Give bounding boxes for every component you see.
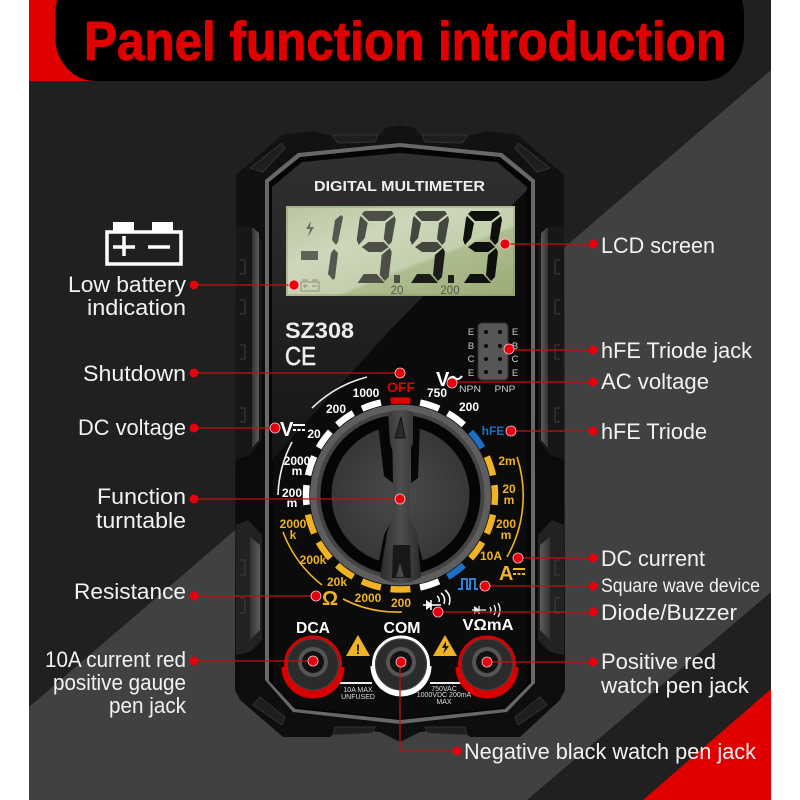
- rotary dial: [310, 404, 491, 586]
- label: low battery indication: Low battery: [68, 272, 186, 297]
- dial scale labels: hFE: [482, 424, 504, 438]
- label: hFE triode: hFE Triode: [601, 419, 707, 444]
- LCD bolt icon: [306, 221, 314, 237]
- hFE socket: E: [512, 327, 518, 338]
- dial function symbols: V: [280, 419, 294, 441]
- label: function turntable: [96, 484, 186, 533]
- dial scale labels: 20k: [327, 575, 347, 589]
- dial function symbols: A: [499, 563, 513, 585]
- jack DCA: [282, 637, 344, 699]
- label: square wave device: Square wave device: [601, 576, 760, 597]
- dial scale labels: m: [501, 528, 511, 542]
- jack ratings: UNFUSED: [341, 694, 375, 701]
- dial scale labels: 200k: [300, 553, 327, 567]
- hFE socket: PNP: [494, 384, 516, 395]
- dial handle: [380, 410, 421, 584]
- label: low battery indication: [68, 272, 186, 320]
- dial scale labels: [280, 379, 516, 610]
- jack ratings: MAX: [436, 699, 452, 706]
- leader dots inside device: [270, 239, 523, 667]
- dial scale labels: m: [292, 464, 302, 478]
- title: Panel function introduction: [84, 10, 726, 72]
- shell corner recesses: [250, 135, 550, 735]
- dial scale labels: k: [290, 528, 297, 542]
- dial function symbols: Ω: [322, 588, 338, 610]
- dial scale labels: 2m: [498, 454, 516, 468]
- label: 10A current jack: pen jack: [109, 693, 187, 718]
- label: positive red jack: watch pen jack: [600, 673, 750, 698]
- dial scale labels: 200: [391, 596, 411, 610]
- LCD battery icon: [301, 280, 319, 291]
- label: positive red jack: [600, 649, 750, 698]
- jack labels: VΩmA: [462, 617, 514, 634]
- dial function symbols: V: [436, 369, 450, 391]
- jack ratings: [341, 686, 472, 706]
- label: resistance: Resistance: [74, 579, 186, 604]
- dial scale labels: m: [504, 493, 514, 507]
- LCD digit 1: [328, 215, 343, 280]
- leader lines: [194, 244, 593, 751]
- label: hFE triode jack: hFE Triode jack: [601, 338, 753, 363]
- dial scale labels: 200: [326, 402, 346, 416]
- dial scale labels: 2000: [280, 517, 307, 531]
- left side grip: [236, 225, 262, 655]
- icon: battery: [107, 222, 181, 264]
- leader dots outside device: [190, 240, 598, 756]
- LCD range labels: 200: [440, 285, 460, 297]
- hFE socket: B: [512, 341, 518, 352]
- label: positive red jack: Positive red: [601, 649, 716, 674]
- jack VΩmA: [456, 637, 518, 698]
- jack labels: [296, 617, 514, 637]
- label: DC current: DC current: [601, 546, 705, 571]
- LCD minus sign: [301, 251, 318, 260]
- hFE socket: E: [468, 368, 474, 379]
- warning icon left: [346, 635, 370, 657]
- LCD digit 9 third: [463, 211, 502, 283]
- jack ratings: 10A MAX: [343, 687, 373, 694]
- hFE socket: [459, 323, 519, 395]
- label: function turntable: turntable: [96, 508, 186, 533]
- label: DC voltage: DC voltage: [78, 415, 186, 440]
- label: 10A current jack: positive gauge: [53, 670, 186, 695]
- label: AC voltage: AC voltage: [601, 369, 709, 394]
- dial scale labels: 20: [307, 427, 321, 441]
- jack labels: DCA: [296, 620, 330, 637]
- brand heading: DIGITAL MULTIMETER: [314, 179, 486, 195]
- LCD screen: [286, 206, 515, 297]
- hFE socket: E: [512, 368, 518, 379]
- diode and buzzer symbol: [472, 603, 500, 617]
- jack ratings: 750VAC: [431, 686, 457, 693]
- right side grip: [538, 225, 564, 655]
- dial scale labels: 10A: [480, 549, 502, 563]
- jack ratings: 1000VDC 200mA: [417, 692, 472, 699]
- label: shutdown: Shutdown: [83, 361, 186, 386]
- title banner: [29, 0, 744, 81]
- jack labels: COM: [384, 620, 420, 637]
- dial scale labels: 200: [459, 400, 479, 414]
- dial scale labels: OFF: [387, 379, 415, 395]
- label: low battery indication: indication: [87, 295, 186, 320]
- hFE socket: E: [468, 327, 474, 338]
- jack COM: [370, 637, 432, 696]
- hFE socket: C: [512, 354, 519, 365]
- LCD digit 9 first: [357, 211, 396, 283]
- dial scale labels: 2000: [284, 454, 311, 468]
- LCD digit 9 second: [410, 211, 449, 283]
- CE mark: CE: [285, 341, 316, 371]
- dial function symbols: [280, 369, 525, 610]
- label: 10A current jack: 10A current red: [45, 647, 186, 672]
- device body shell: [235, 125, 565, 742]
- dial scale labels: 1000: [353, 386, 380, 400]
- handle shadows: [378, 424, 424, 570]
- label: diode buzzer: Diode/Buzzer: [601, 600, 737, 625]
- dial range arcs: [278, 377, 523, 612]
- warning icon right: [433, 635, 457, 656]
- warning icon left: !: [356, 641, 360, 657]
- dial scale labels: m: [287, 496, 297, 510]
- warning lines: [340, 682, 462, 684]
- multimeter device: [235, 125, 565, 742]
- hFE socket: C: [468, 354, 475, 365]
- label: 10A current jack: [45, 647, 187, 718]
- model name: SZ308: [285, 318, 354, 343]
- hFE socket: B: [468, 341, 474, 352]
- handle pointer: [395, 417, 405, 438]
- dial scale labels: 750: [427, 386, 447, 400]
- label: function turntable: Function: [97, 484, 186, 509]
- dial scale labels: 200: [282, 486, 302, 500]
- dial scale labels: 2000: [355, 591, 382, 605]
- dial scale labels: 20: [502, 482, 516, 496]
- LCD decimal points: [394, 275, 454, 283]
- hFE socket: NPN: [459, 384, 481, 395]
- dial scale labels: 200: [496, 517, 516, 531]
- label: LCD screen: LCD screen: [601, 233, 715, 258]
- LCD range labels: 20: [391, 285, 403, 297]
- label: negative black jack: Negative black watch pen jack: [464, 739, 757, 764]
- LCD range labels: [391, 285, 460, 297]
- dial tick marks: [267, 362, 534, 628]
